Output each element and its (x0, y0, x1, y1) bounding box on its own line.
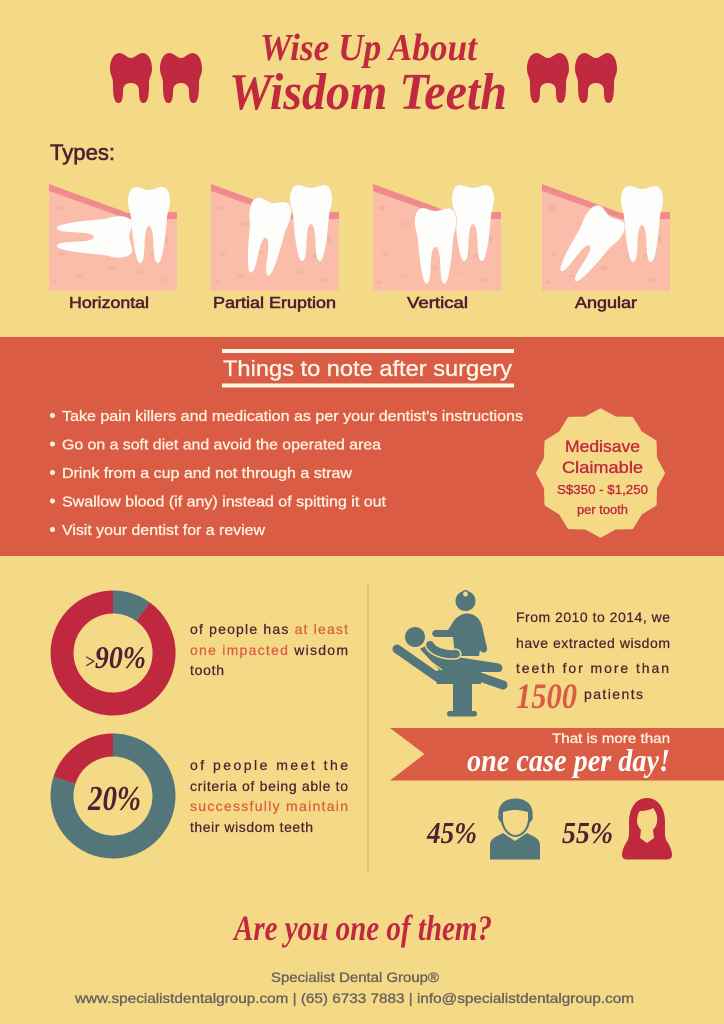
text: maintain stat: criteria of being able to (190, 778, 348, 794)
text: maintain stat: successfully maintain (190, 798, 348, 814)
heading: types: Types: (50, 140, 115, 165)
list: aftercare: Drink from a cup and not through a straw (62, 465, 352, 482)
text: extraction stat: From 2010 to 2014, we (516, 609, 670, 625)
footer: www.specialistdentalgroup.com | (65) 6733 7883 | info@specialistdentalgroup.com (74, 990, 634, 1006)
text: extraction stat: teeth for more than (516, 660, 669, 676)
list: aftercare: Visit your dentist for a review (62, 522, 265, 539)
heading: things to note (222, 349, 514, 388)
badge: medisave: per tooth (577, 502, 628, 517)
text: extraction stat: have extracted wisdom (516, 635, 670, 651)
panel: horizontal (49, 184, 177, 312)
closing question: Are you one of them? (232, 908, 492, 948)
ribbon: one case per day (390, 728, 724, 780)
title: Wisdom Teeth (229, 64, 507, 121)
panel: partial eruption: Partial Eruption (213, 295, 336, 312)
text: maintain stat: of people meet the (190, 757, 348, 773)
badge: medisave: Claimable (562, 458, 643, 477)
chart: donut 20 percent: 20% (87, 779, 141, 818)
badge: medisave: S$350 - $1,250 (557, 482, 648, 497)
heading: things to note: Things to note after surgery (223, 356, 512, 381)
ribbon: one case per day: one case per day! (467, 742, 670, 778)
stat: 55 percent women: 55% (562, 815, 613, 850)
list: aftercare: Take pain killers and medication as per your dentist’s instructions (62, 408, 523, 425)
text: extraction stat (516, 609, 670, 716)
panel: vertical (373, 184, 501, 312)
list: aftercare (50, 408, 523, 539)
text: extraction stat: patients (584, 686, 643, 702)
divider (368, 585, 369, 872)
panel: angular (542, 184, 670, 312)
ribbon: one case per day: That is more than (552, 730, 670, 746)
text: maintain stat: their wisdom teeth (190, 819, 313, 835)
icon: teeth right (527, 53, 617, 103)
chart: donut 90 percent (62, 602, 164, 704)
panel: angular: Angular (575, 295, 638, 312)
text: impacted stat: one impacted wisdom (190, 642, 348, 658)
chart: donut 20 percent (62, 745, 164, 847)
title (229, 27, 507, 121)
text: impacted stat: tooth (190, 662, 224, 678)
text: extraction stat: 1500 (516, 676, 577, 716)
badge: medisave: Medisave (565, 437, 640, 456)
icon: teeth left (110, 53, 202, 103)
panel: partial eruption (211, 184, 339, 312)
list: aftercare: Swallow blood (if any) instead of spitting it out (62, 494, 387, 510)
text: impacted stat (190, 621, 348, 678)
panel: vertical: Vertical (407, 295, 468, 312)
list: aftercare: Go on a soft diet and avoid the operated area (62, 436, 382, 454)
icon: man (490, 798, 540, 860)
title: Wise Up About (260, 27, 478, 69)
text: maintain stat (190, 757, 348, 835)
footer (74, 969, 634, 1006)
footer: Specialist Dental Group® (271, 969, 440, 985)
badge: medisave (538, 410, 664, 536)
stat: 45 percent men: 45% (426, 815, 477, 850)
icon: dentist and patient (397, 591, 503, 716)
icon: woman (622, 798, 672, 860)
chart: donut 90 percent: >90% (85, 639, 146, 675)
text: impacted stat: of people has at least (190, 621, 348, 637)
panel: horizontal: Horizontal (69, 295, 149, 312)
panel: after surgery band (0, 337, 724, 556)
